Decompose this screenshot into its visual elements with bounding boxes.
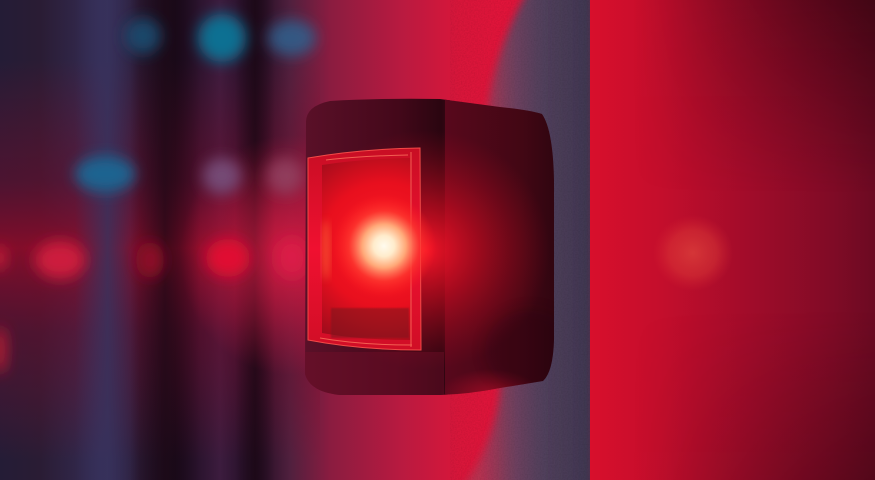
dark lower side corner [488,313,533,386]
glowing core [332,194,436,298]
side of housing [445,95,560,400]
alarm housing [305,98,554,395]
reflection under the housing [444,372,528,394]
bokeh lights [0,14,316,374]
lens frame [308,148,421,350]
panel glow spot [653,215,733,291]
lamp lens [308,148,436,350]
light spill on housing [376,138,542,360]
right red panel [590,0,875,480]
lower front tone [304,352,444,396]
darker lower lens area [331,308,409,338]
inner lens panel [322,158,410,340]
left lens flare [322,220,330,280]
textured wall [450,0,595,480]
